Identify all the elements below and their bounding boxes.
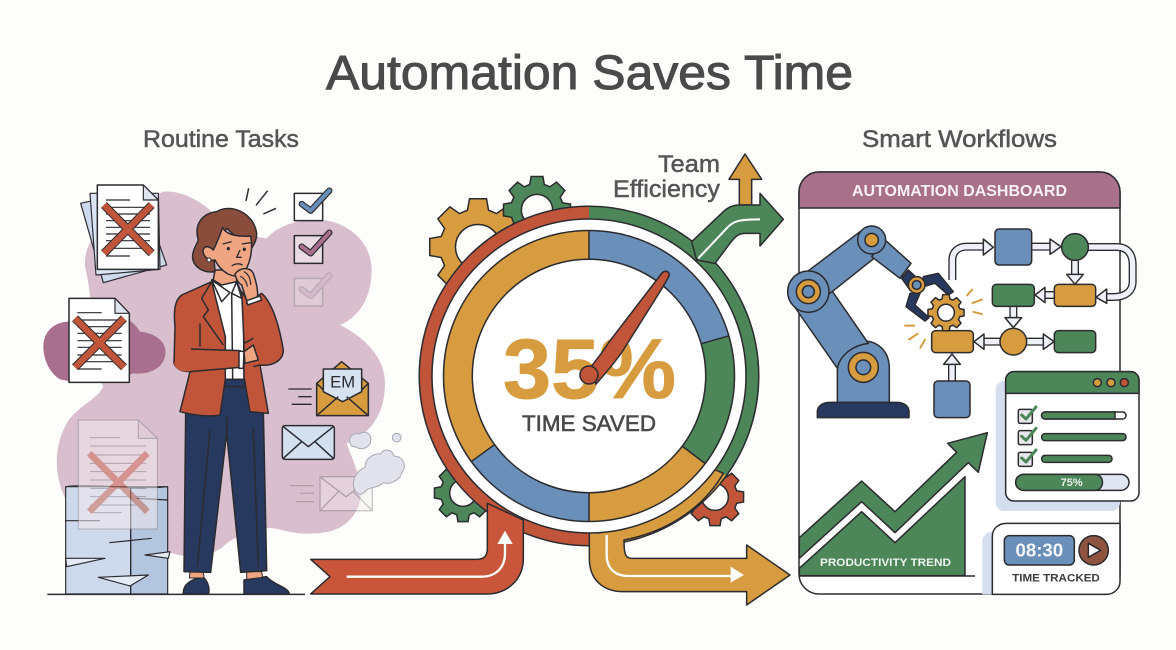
trousers	[184, 383, 267, 572]
flow nodes	[932, 229, 1096, 418]
task window	[996, 372, 1139, 511]
task checks	[1018, 409, 1032, 466]
neck and face	[213, 270, 237, 285]
heading: team efficiency	[613, 151, 720, 203]
gauge needle	[580, 271, 669, 384]
heading: team efficiency: Efficiency	[613, 176, 720, 203]
task bars	[1042, 412, 1126, 419]
icon: gold email	[288, 362, 368, 416]
hand on chin	[235, 269, 258, 301]
belt	[225, 379, 245, 387]
icon: document stack crossed out	[81, 185, 167, 283]
value: 35%: 35%	[503, 322, 676, 416]
productivity trend chart: PRODUCTIVITY TREND	[820, 557, 951, 569]
shoes	[183, 577, 289, 594]
heading: routine tasks: Routine Tasks	[143, 126, 299, 153]
icon: blue email	[282, 426, 334, 459]
heading: smart workflows: Smart Workflows	[862, 126, 1057, 153]
task window: 75%	[1061, 477, 1083, 489]
dashboard title: AUTOMATION DASHBOARD	[852, 183, 1067, 200]
dashboard header	[799, 172, 1120, 208]
productivity chart and widgets	[799, 372, 1139, 594]
arrow: green efficiency	[692, 193, 783, 263]
flow arrows	[311, 154, 790, 605]
pink background blob	[57, 192, 385, 557]
checklist icons	[294, 191, 329, 306]
robot arm and workflow	[788, 226, 1133, 418]
jacket	[174, 282, 283, 416]
ground line	[47, 592, 305, 597]
heading: team efficiency: Team	[658, 151, 720, 178]
robot arm	[788, 226, 953, 418]
title: Automation Saves Time	[326, 47, 853, 100]
ankles	[189, 572, 263, 579]
panel: automation dashboard	[788, 172, 1139, 594]
gears behind gauge	[430, 177, 744, 526]
gauge donut segments	[406, 193, 772, 559]
hollow flow arrows	[952, 247, 1133, 381]
hair	[193, 208, 257, 272]
time tracked widget: TIME TRACKED	[1012, 573, 1100, 585]
gear: gold	[430, 199, 526, 295]
productivity trend chart	[799, 433, 987, 576]
faded document	[78, 420, 157, 529]
progress bar	[1016, 474, 1129, 490]
icon: document crossed out	[69, 298, 129, 382]
arrow: gold output	[589, 463, 790, 605]
shirt	[212, 277, 244, 379]
time tracked widget: 08:30	[1015, 540, 1063, 561]
paper stack	[66, 486, 170, 594]
face features	[223, 242, 251, 266]
icon: faded email	[290, 477, 372, 511]
gauge: 35% time saved	[406, 193, 772, 559]
arrow: up gold	[729, 154, 762, 205]
gear: green bottom	[434, 464, 492, 522]
gear: red bottom	[686, 468, 744, 526]
character: worried woman	[174, 208, 289, 594]
stress marks	[246, 188, 276, 214]
time tracked widget	[982, 523, 1120, 594]
dark cloud	[43, 314, 166, 382]
smoke puffs	[350, 432, 404, 494]
icon: gold email: EM	[330, 373, 355, 392]
arrow: red input	[311, 503, 523, 594]
label: time saved: TIME SAVED	[522, 411, 656, 436]
gear with sparks	[904, 289, 983, 348]
gear: green top	[504, 177, 570, 243]
gauge outer ring	[361, 148, 817, 604]
panel: routine tasks illustration	[43, 185, 404, 594]
arm across	[239, 351, 244, 368]
